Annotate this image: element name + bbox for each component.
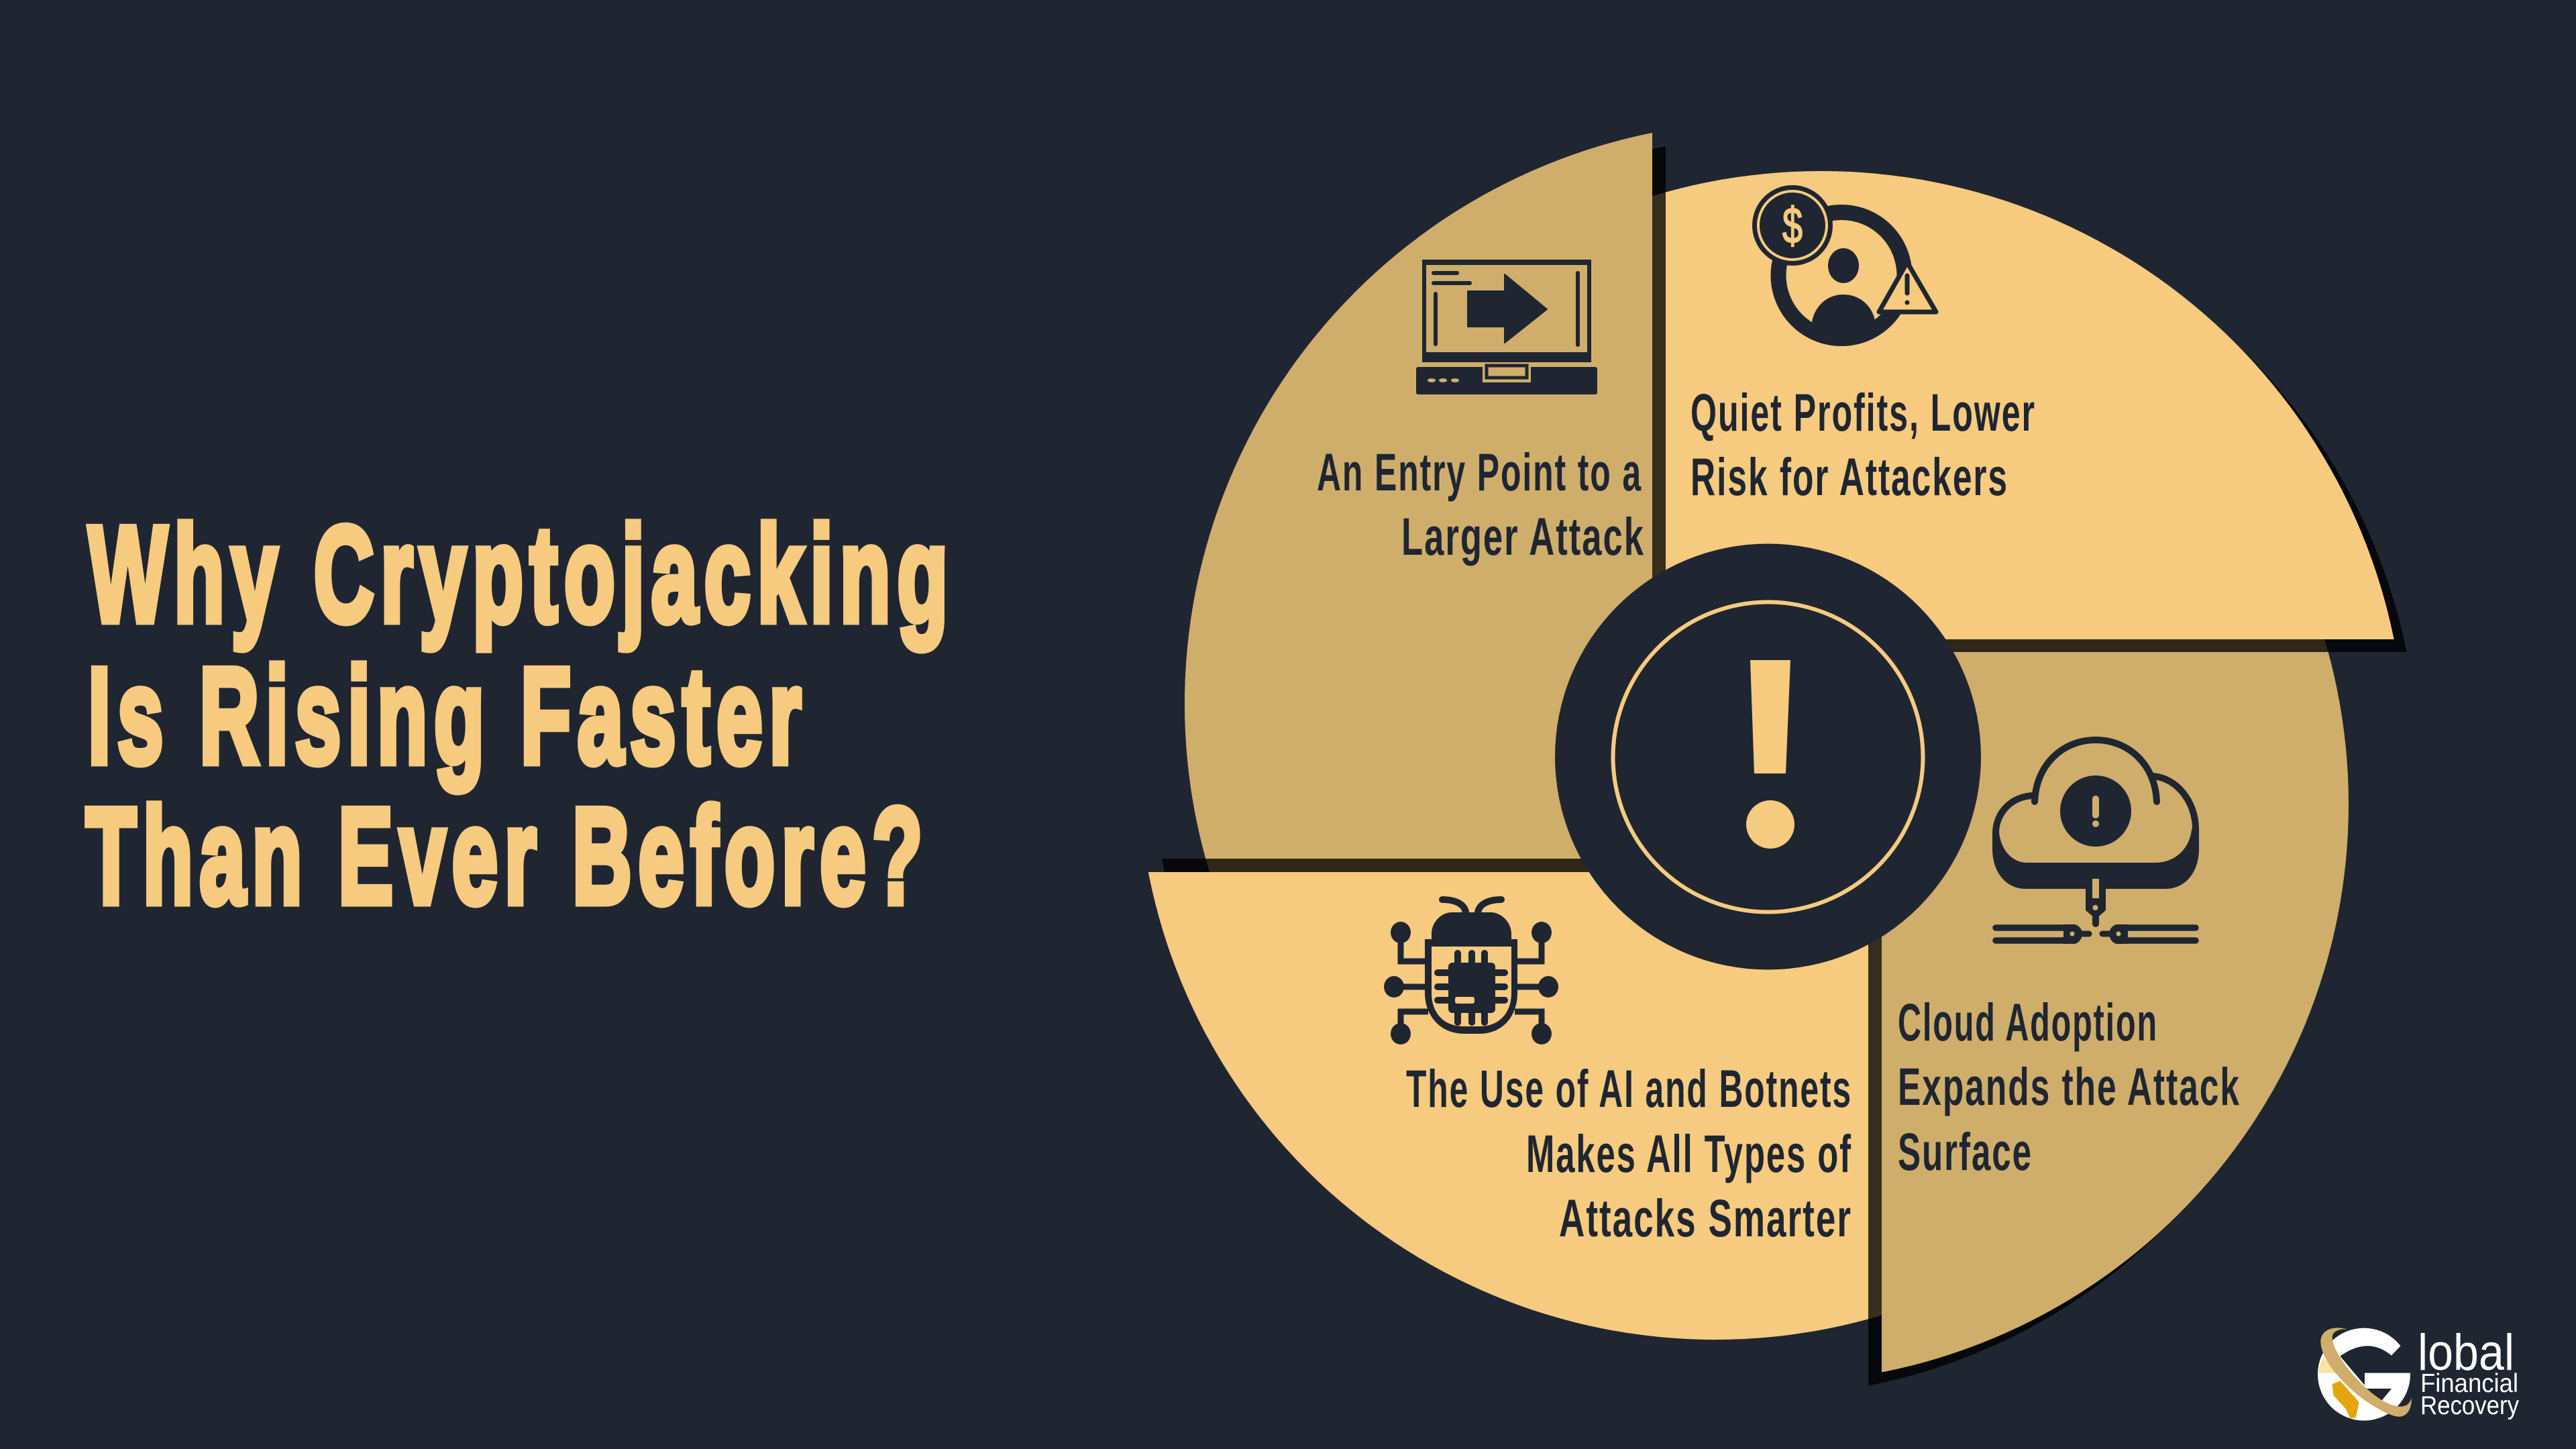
- petal: top-right with shadow: [1652, 171, 2407, 652]
- icon: cloud with alert: [1992, 740, 2199, 944]
- title: [86, 498, 955, 932]
- text: the use of AI: Makes All Types of: [1526, 1124, 1852, 1183]
- petal: top-left base layer: [1185, 133, 1652, 872]
- icon: user with coin and warning: $: [1782, 197, 1803, 254]
- icon: laptop with arrow: [1416, 260, 1597, 394]
- icon: user with coin and warning: [1752, 185, 1936, 338]
- logo: Global Financial Recovery: lobal: [2418, 1324, 2514, 1381]
- text: quiet profits: Quiet Profits, Lower: [1690, 382, 2036, 442]
- text: the use of AI: Attacks Smarter: [1559, 1188, 1852, 1248]
- text: cloud adoption: [1898, 992, 2241, 1181]
- text: the use of AI: The Use of AI and Botnets: [1406, 1059, 1852, 1118]
- text: quiet profits: Risk for Attackers: [1690, 447, 2008, 506]
- text: cloud adoption: Surface: [1898, 1122, 2033, 1181]
- petal: bottom-left with shadow: [1148, 859, 1882, 1340]
- logo: Global Financial Recovery: Financial: [2420, 1369, 2518, 1398]
- petal: top-left with shadow: [1185, 133, 1666, 859]
- text: an entry point: An Entry Point to a: [1317, 442, 1642, 502]
- icon: bug with chip: [1384, 900, 1558, 1044]
- text: cloud adoption: Expands the Attack: [1898, 1057, 2241, 1116]
- text: cloud adoption: Cloud Adoption: [1898, 992, 2158, 1052]
- title: Is Rising Faster: [88, 640, 808, 792]
- text: the use of AI: [1406, 1059, 1852, 1248]
- title: Why Cryptojacking: [89, 498, 955, 651]
- logo: Global Financial Recovery: [2318, 1324, 2519, 1421]
- center alert badge: [1555, 543, 1981, 970]
- logo: Global Financial Recovery: Recovery: [2420, 1391, 2519, 1420]
- text: quiet profits: [1690, 382, 2036, 506]
- petal: bottom-right with shadow: [1868, 639, 2349, 1386]
- text: an entry point: Larger Attack: [1401, 506, 1645, 566]
- title: Than Ever Before?: [86, 780, 929, 932]
- text: an entry point: [1317, 442, 1645, 566]
